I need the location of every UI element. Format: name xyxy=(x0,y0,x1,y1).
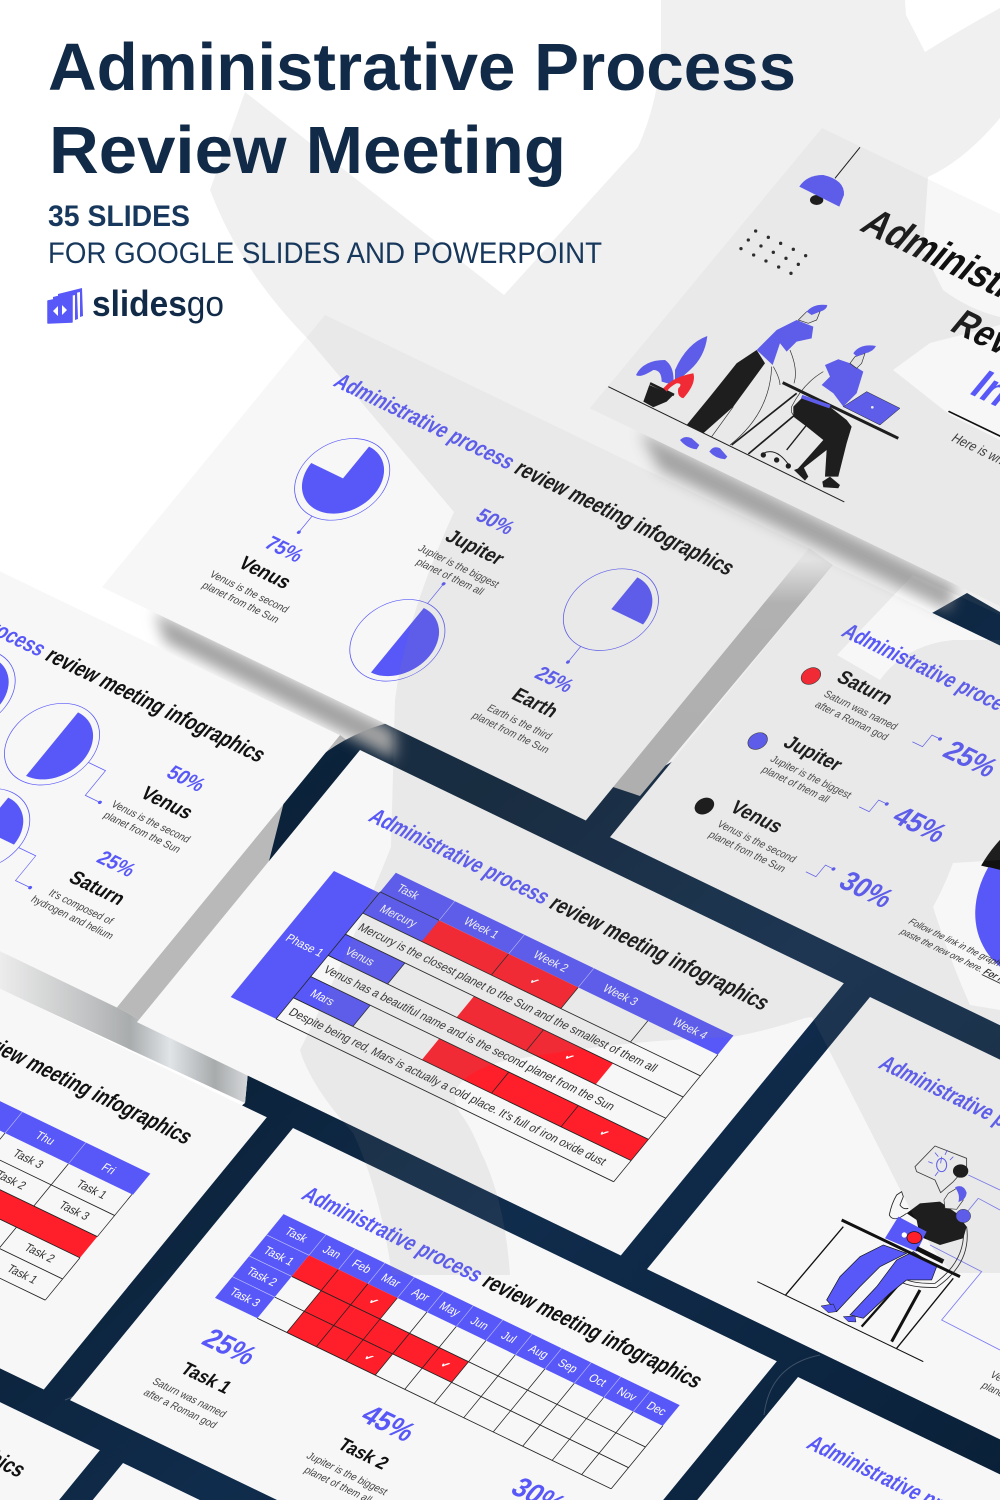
slide title xyxy=(0,556,272,767)
saturn item xyxy=(784,653,1000,789)
slide title: Administrative process xyxy=(297,1182,489,1287)
phase gantt table: ✔ xyxy=(596,1127,612,1140)
illustration: seated person with laptop xyxy=(757,1146,1000,1362)
slide: gantt phase table xyxy=(137,750,844,1255)
weekly table: Task 3 xyxy=(10,1148,46,1171)
jupiter label: 50% xyxy=(471,505,519,539)
cover heading xyxy=(787,201,1000,497)
task 2 stat: Jupiter is the biggest xyxy=(304,1451,390,1498)
venus label: Venus xyxy=(136,783,198,824)
earth label xyxy=(469,653,599,756)
monthly gantt table: Jul xyxy=(498,1330,519,1346)
venus label: planet from the Sun xyxy=(101,810,183,856)
subtitle: 35 SLIDES xyxy=(48,200,190,233)
jupiter item: planet of them all xyxy=(759,765,832,805)
phase gantt table: Venus xyxy=(342,946,377,969)
earth label: planet from the Sun xyxy=(469,711,552,756)
monthly gantt table: Mar xyxy=(378,1272,403,1290)
weekly table: Thu xyxy=(32,1130,57,1148)
dot pattern xyxy=(739,229,807,275)
venus item: 30% xyxy=(833,865,901,914)
venus label xyxy=(100,752,232,856)
slide: bottom partial xyxy=(0,1463,607,1500)
phase gantt table: Week 3 xyxy=(600,983,640,1008)
earth label: 25% xyxy=(530,663,578,697)
phase gantt table: Task xyxy=(394,883,422,902)
slide: top pie charts xyxy=(102,315,809,820)
saturn label: 25% xyxy=(92,847,140,882)
weekly table: Task 1 xyxy=(73,1178,109,1202)
venus label: 75% xyxy=(260,533,308,567)
icon: potted plant xyxy=(636,336,707,407)
dark navy backdrop xyxy=(0,593,1000,1500)
cover divider and caption xyxy=(930,411,1000,532)
pie: jupiter 50% xyxy=(330,565,482,695)
phase gantt table: Week 2 xyxy=(530,949,571,975)
slide title: review meeting infographics xyxy=(477,1269,709,1393)
floor line xyxy=(608,387,844,502)
monthly gantt table: Task 1 xyxy=(260,1245,296,1268)
venus label: Venus xyxy=(234,552,296,594)
shadow band between left pie slide and gantt slide xyxy=(117,735,360,1020)
shadow under top pie slide xyxy=(155,612,395,760)
slide: monthly gantt xyxy=(70,1128,777,1500)
phase gantt table: Despite being red, Mars is actually a cold place. It's full of iron oxide dust xyxy=(286,1007,609,1168)
monthly gantt table: Task 3 xyxy=(227,1286,262,1310)
shadow band between saturn slide and top pie slide xyxy=(613,548,833,796)
task 1 stat xyxy=(140,1317,277,1431)
saturn item: Saturn was named xyxy=(821,689,900,733)
jupiter item: 45% xyxy=(886,800,954,849)
main title: Administrative Process xyxy=(48,30,796,105)
logo: slidesgo xyxy=(48,283,224,324)
earth label: Earth xyxy=(507,684,563,722)
slide: saturn jupiter venus stats xyxy=(610,565,1000,1070)
jupiter item xyxy=(731,718,962,855)
monthly gantt table: Nov xyxy=(614,1386,639,1404)
phase gantt table: Mars xyxy=(307,988,337,1008)
phase gantt table: Week 1 xyxy=(461,916,501,941)
pie: venus 75% xyxy=(261,425,409,552)
slide title: review meeting infographics xyxy=(509,456,741,580)
slide title xyxy=(329,369,741,580)
slide: bottom right partial xyxy=(575,1377,1000,1500)
venus item: Venus is the second xyxy=(714,819,799,865)
slide: left pie charts xyxy=(0,502,340,1007)
translucent grey background figure xyxy=(210,0,1000,1275)
pie: partial upper xyxy=(0,636,35,745)
task 1 stat: Saturn was named xyxy=(149,1377,229,1420)
task 1 stat: 25% xyxy=(196,1323,264,1371)
jupiter label: Jupiter xyxy=(440,525,509,570)
monthly gantt table: Dec xyxy=(643,1400,669,1418)
pie: earth 25% xyxy=(530,555,678,681)
venus label xyxy=(198,522,330,626)
monthly gantt table xyxy=(215,1214,680,1489)
saturn item: after a Roman god xyxy=(812,700,891,743)
slide: weekly schedule table (left) xyxy=(0,884,267,1389)
task 1 stat: Task 1 xyxy=(176,1359,236,1397)
jupiter label xyxy=(407,494,542,601)
slide title xyxy=(0,938,199,1149)
venus label: Venus is the second xyxy=(207,569,291,616)
slide title: Administrative process xyxy=(364,804,556,909)
jupiter item: Jupiter xyxy=(779,732,848,776)
wordmark: slidesgo xyxy=(92,283,224,324)
shadow band under left pie slide xyxy=(0,951,248,1103)
earth label: Earth is the third xyxy=(484,703,554,742)
phase gantt table: Phase 1 xyxy=(283,933,326,959)
slide title: review meeting infographics xyxy=(544,891,776,1015)
seated person with laptop xyxy=(791,345,900,488)
slide title xyxy=(364,804,776,1015)
slide title: review meeting infographics xyxy=(40,643,272,767)
task 1 stat: after a Roman god xyxy=(141,1388,219,1431)
standing person xyxy=(680,305,827,459)
slide: title cover xyxy=(590,128,1000,642)
subtitle xyxy=(48,200,602,270)
main title xyxy=(48,30,796,188)
slide title xyxy=(297,1182,709,1393)
saturn item: Saturn xyxy=(832,667,898,709)
illustration: two people at a desk xyxy=(608,147,900,502)
monthly gantt table: Oct xyxy=(586,1372,609,1390)
saturn label xyxy=(28,836,163,942)
saturn label: Saturn xyxy=(64,867,130,910)
main title: Review Meeting xyxy=(49,113,566,188)
subtitle: FOR GOOGLE SLIDES AND POWERPOINT xyxy=(48,237,602,270)
slide title: Administrative process xyxy=(329,369,521,474)
phase gantt table: Mercury xyxy=(377,903,419,930)
phase gantt table: Week 4 xyxy=(669,1016,710,1042)
task 2 stat xyxy=(295,1391,438,1500)
monthly gantt table: Sep xyxy=(555,1357,580,1376)
weekly table xyxy=(0,989,150,1301)
task 2 stat: Task 2 xyxy=(334,1434,393,1473)
saturn label: It's composed of xyxy=(46,888,115,927)
venus label: Venus is the second xyxy=(108,799,193,846)
pie: venus 50% xyxy=(0,690,152,815)
monthly gantt table: Task 2 xyxy=(243,1266,279,1289)
shadow under title slide xyxy=(640,432,955,612)
donut chart xyxy=(924,754,1000,1018)
monthly gantt table: Task xyxy=(282,1226,310,1245)
phase gantt table: ✔ xyxy=(562,1051,577,1064)
monthly gantt table: Jan xyxy=(320,1244,343,1261)
weekly table: Task 3 xyxy=(56,1200,92,1223)
saturn label: hydrogen and helium xyxy=(28,894,116,942)
desk and chair xyxy=(732,383,898,469)
monthly gantt table: May xyxy=(436,1300,463,1319)
monthly gantt table: Feb xyxy=(349,1258,373,1276)
monthly gantt table: Aug xyxy=(525,1343,551,1361)
monthly gantt table: Jun xyxy=(467,1315,491,1333)
venus label: planet from the Sun xyxy=(199,580,281,626)
phase gantt table: Venus has a beautiful name and is the second planet from the Sun xyxy=(320,964,617,1113)
jupiter label: Jupiter is the biggest xyxy=(415,543,501,590)
phase gantt table: Mercury is the closest planet to the Sun and the smallest of them all xyxy=(355,922,660,1075)
slide: person at desk xyxy=(647,997,1000,1500)
icon: stacked slides xyxy=(48,288,83,323)
slide: bottom left partial xyxy=(0,1217,100,1500)
phase gantt table: ✔ xyxy=(527,975,542,988)
decorative navy arcs xyxy=(65,1355,820,1415)
monthly gantt table: Apr xyxy=(409,1287,432,1304)
monthly gantt table: ✔ xyxy=(438,1359,453,1372)
pie: saturn 25% xyxy=(0,775,82,900)
jupiter label: planet of them all xyxy=(413,557,486,598)
venus item xyxy=(678,783,909,920)
phase gantt table xyxy=(231,851,734,1182)
monthly gantt table: ✔ xyxy=(361,1351,377,1365)
jupiter item: Jupiter is the biggest xyxy=(768,754,854,801)
venus item: planet from the Sun xyxy=(706,830,788,875)
weekly table: Task 1 xyxy=(4,1263,40,1286)
weekly table: Task 2 xyxy=(21,1242,57,1265)
monthly gantt table: ✔ xyxy=(366,1295,381,1309)
venus label: 50% xyxy=(162,762,210,796)
icon: ceiling lamp xyxy=(799,147,860,207)
task 2 stat: 45% xyxy=(355,1399,422,1447)
venus item: Venus xyxy=(725,797,788,838)
weekly table: Fri xyxy=(98,1162,118,1177)
